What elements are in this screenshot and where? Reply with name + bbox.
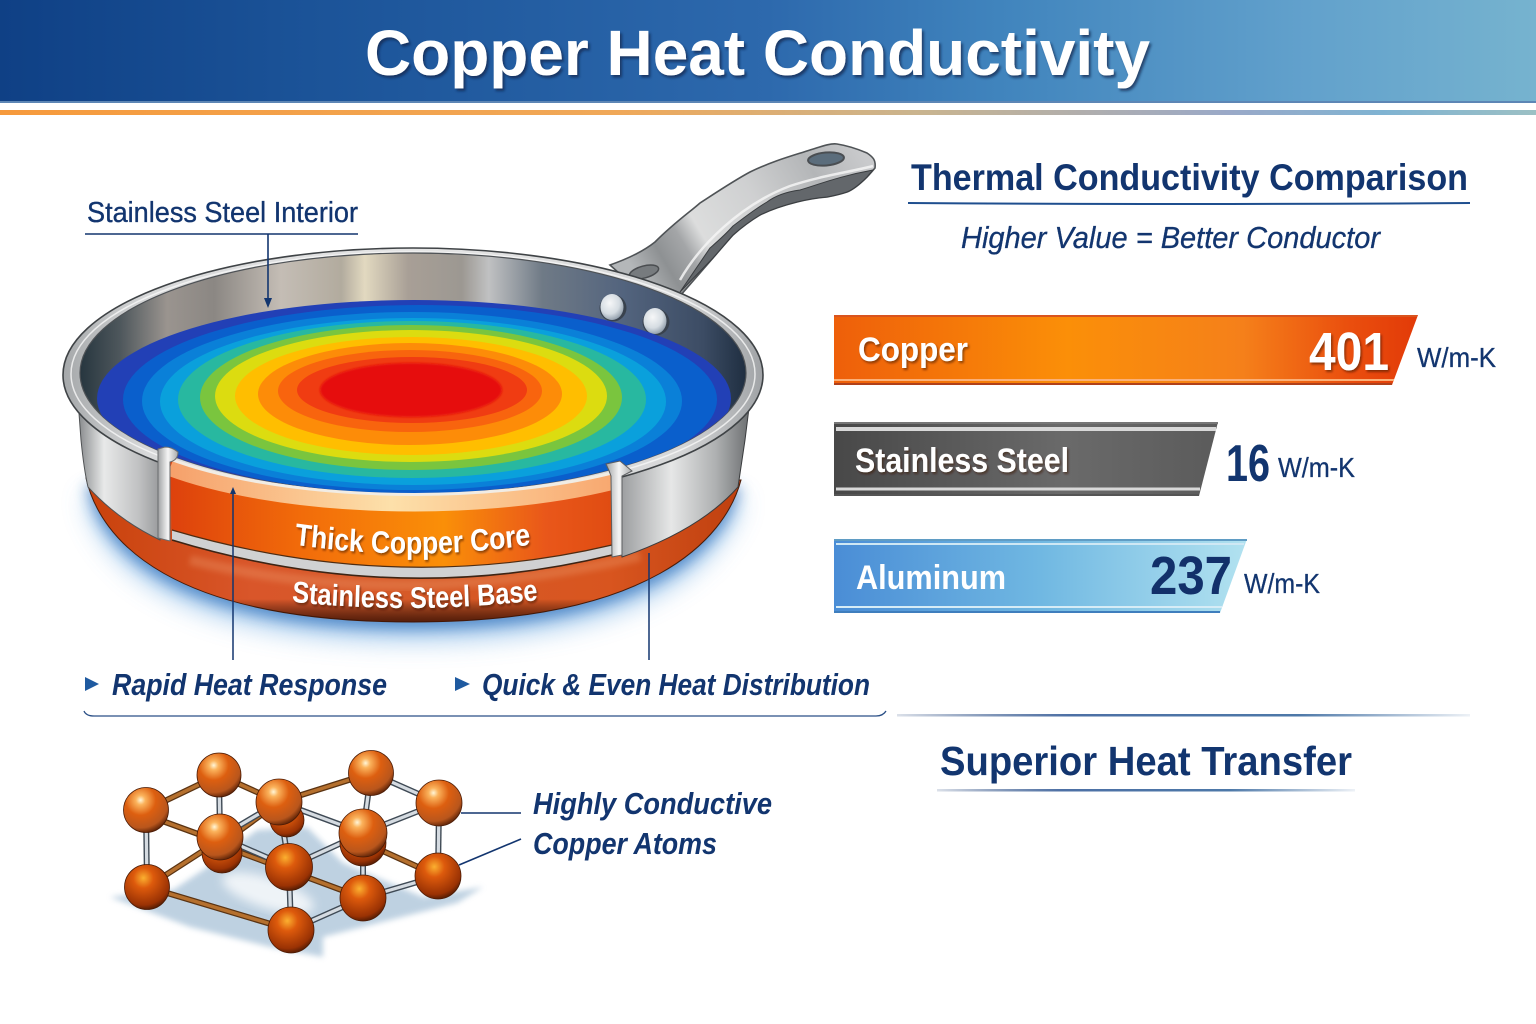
bar: aluminum: 237: [1150, 546, 1232, 606]
label: quick and even heat distribution: Quick & Even Heat Distribution: [482, 667, 870, 702]
heat map rings: [97, 300, 731, 497]
illustration: frying pan cross-section: [62, 143, 876, 656]
header banner: [0, 0, 1536, 115]
bar: aluminum: Aluminum: [856, 559, 1006, 597]
callout: highly conductive copper atoms: Copper Atoms: [533, 826, 717, 861]
bar chart: [834, 315, 1496, 613]
steel clip right: [606, 461, 632, 557]
chart subtitle: Higher Value = Better Conductor: [961, 220, 1382, 255]
callout: stainless steel interior: [85, 197, 358, 308]
chart heading: Thermal Conductivity Comparison: [911, 157, 1468, 198]
atoms: [124, 750, 462, 953]
bonds: [146, 773, 439, 930]
arrow: rapid heat response leader: [230, 487, 236, 660]
bar: stainless steel: W/m-K: [1278, 452, 1355, 483]
stainless steel interior wall: [80, 253, 746, 493]
pan rim: [63, 248, 763, 502]
rivets: [600, 294, 670, 336]
bar: copper: Copper: [858, 331, 968, 369]
bar: stainless steel: Stainless Steel: [855, 442, 1069, 480]
heading: superior heat transfer: Superior Heat Transfer: [940, 738, 1352, 784]
bar: stainless steel: 16: [1226, 435, 1270, 493]
bar: aluminum: W/m-K: [1244, 568, 1320, 599]
callout: stainless steel interior: Stainless Steel Interior: [87, 197, 358, 229]
steel outer wall left: [78, 400, 170, 540]
bar: copper: [834, 315, 1496, 385]
copper base layer: [86, 478, 741, 622]
label: rapid heat response: Rapid Heat Response: [112, 667, 387, 702]
callout: highly conductive copper atoms: Highly Conductive: [533, 786, 772, 821]
bar: copper: 401: [1309, 322, 1389, 382]
diagram: copper atom lattice: [110, 750, 483, 957]
bar: copper: W/m-K: [1417, 342, 1496, 373]
thick copper core panel: [170, 459, 612, 578]
callout: highly conductive copper atoms: [459, 786, 772, 865]
title: Copper Heat Conductivity: [365, 17, 1150, 89]
arrow: even heat distribution leader: [648, 553, 650, 660]
pan handle: [610, 144, 875, 296]
bar: stainless steel: [834, 422, 1355, 496]
bar: aluminum: [834, 539, 1320, 613]
steel outer wall right: [612, 400, 750, 557]
label: thick copper core: Thick Copper Core: [296, 524, 532, 564]
steel clip left: [158, 447, 178, 541]
label: stainless steel base: Stainless Steel Base: [292, 582, 538, 611]
